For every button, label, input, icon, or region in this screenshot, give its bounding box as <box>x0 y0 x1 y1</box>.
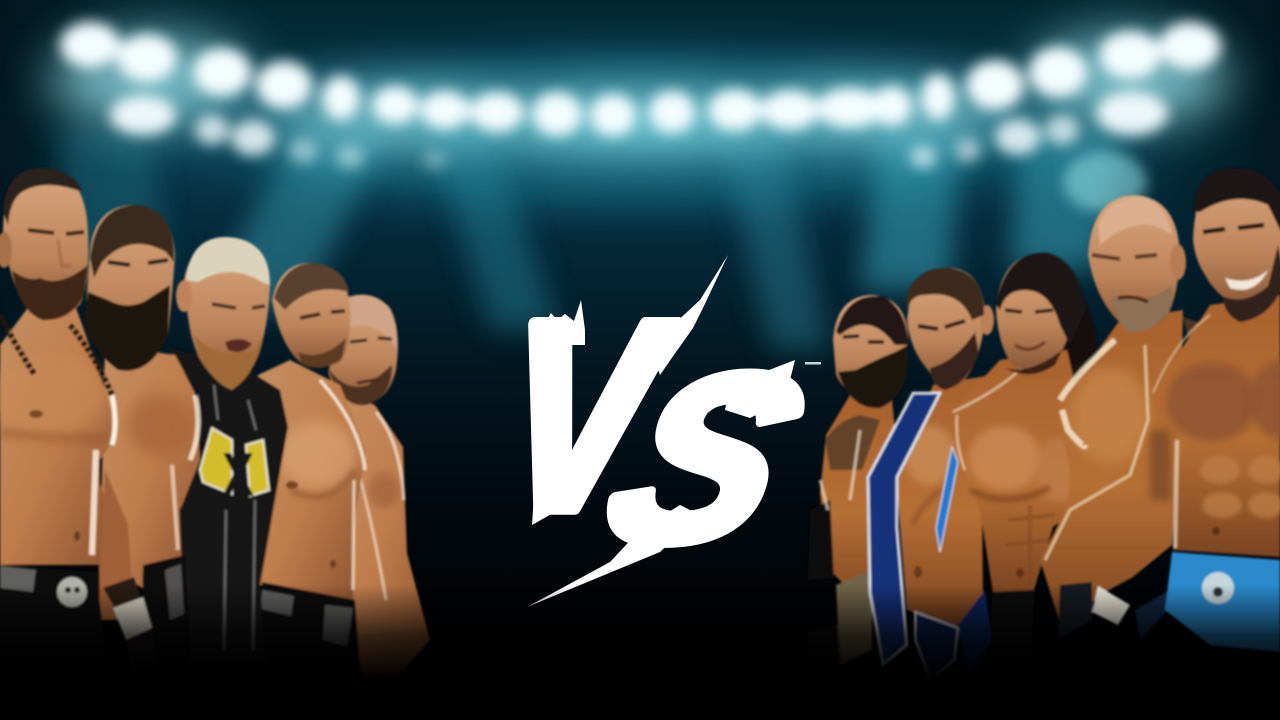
letter V: V <box>490 267 685 566</box>
wrestler R5 <box>1153 168 1280 652</box>
shirt logo <box>200 428 269 510</box>
trunks L1 <box>0 565 112 700</box>
wrestler L5 <box>328 295 430 680</box>
VS emblem <box>490 255 833 607</box>
shirt logo: X <box>222 441 254 510</box>
right team <box>808 168 1280 690</box>
wrestler L2 <box>84 205 200 690</box>
light beams <box>60 130 1120 350</box>
S brush spikes <box>527 360 821 607</box>
wrestler R2 <box>868 268 1003 680</box>
stadium lights <box>50 22 1230 212</box>
wrestler R4 <box>1040 195 1213 640</box>
V brush spikes <box>532 255 728 525</box>
left team <box>0 168 430 700</box>
wrestler L1 <box>0 168 162 700</box>
wrestler L4 <box>255 263 366 690</box>
wrestler R3 <box>953 253 1100 690</box>
bottom black band <box>0 695 1280 720</box>
bottom fade <box>0 585 1280 700</box>
trunks R5 <box>1165 552 1280 652</box>
wrestler L3 black shirt <box>167 237 288 665</box>
wrist bands R4 <box>1058 582 1092 640</box>
wrist bands <box>103 577 142 610</box>
blue vest panels <box>868 393 992 680</box>
letter S: S <box>578 325 833 590</box>
wrestler R1 <box>808 295 908 690</box>
